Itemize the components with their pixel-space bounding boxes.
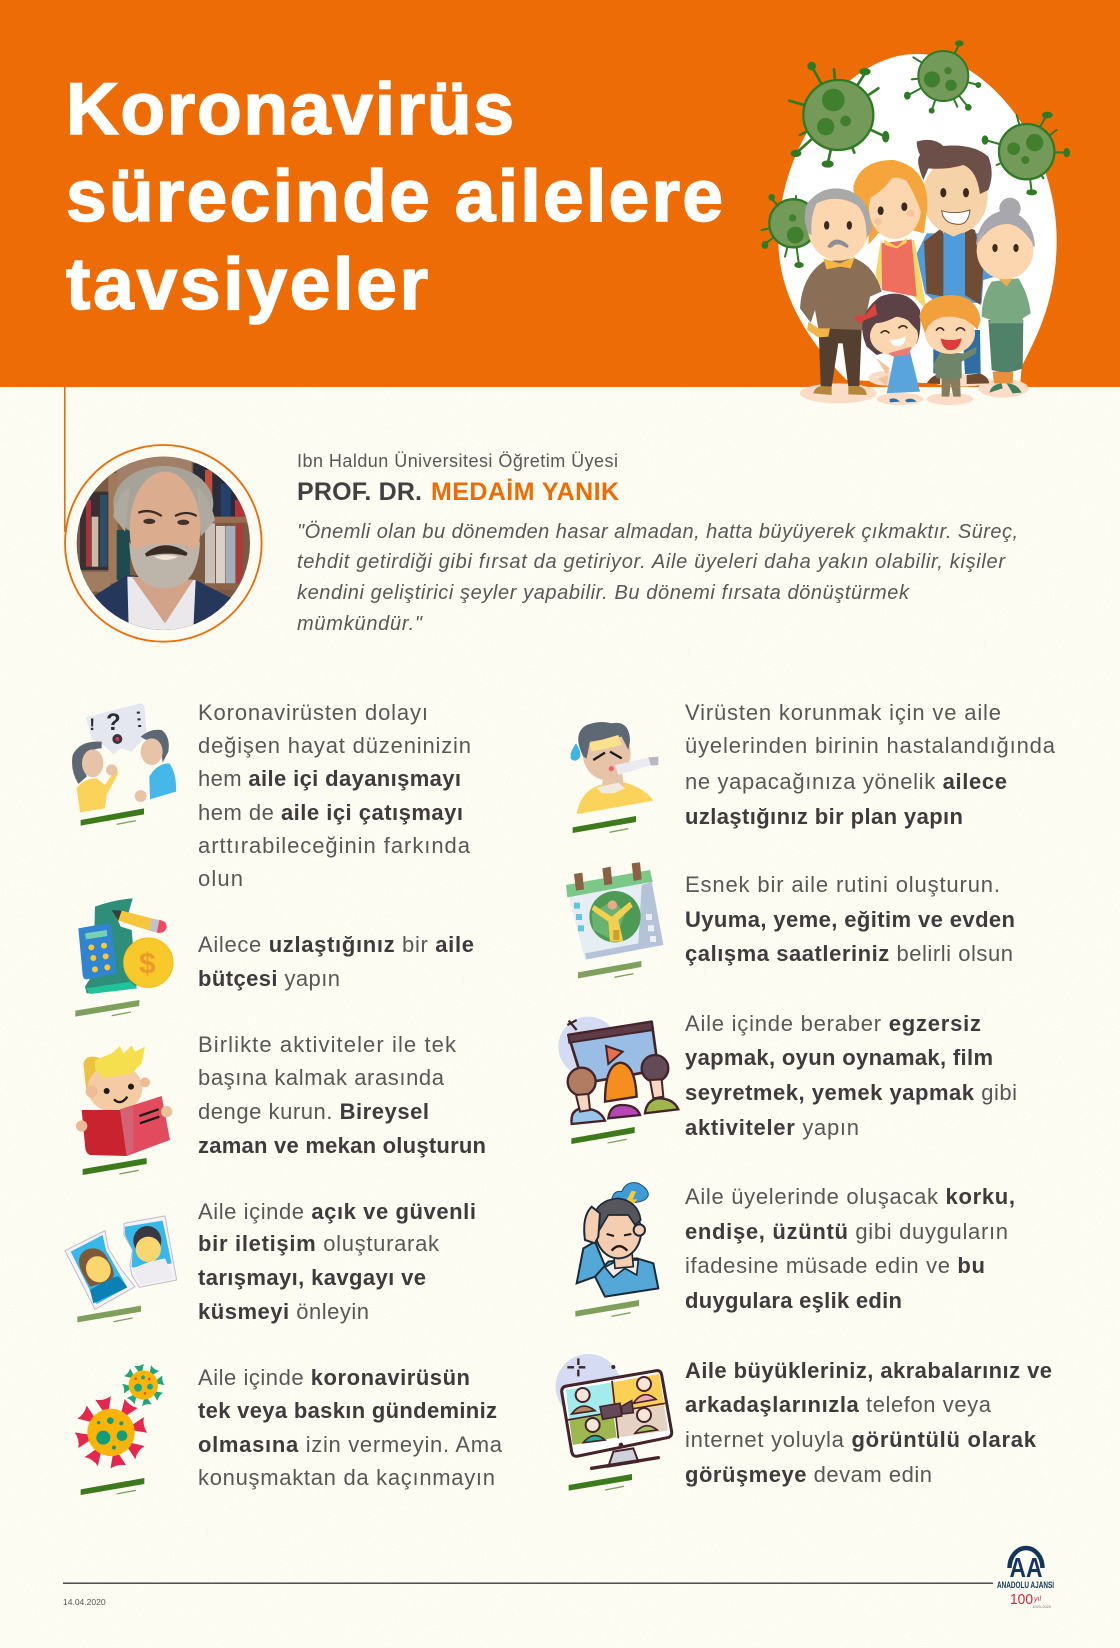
text: individual time: başına kalmak arasında — [198, 1065, 445, 1090]
expert name and role: MEDAİM YANIK — [431, 478, 619, 506]
title — [66, 69, 723, 325]
text: coronavirus agenda: konuşmaktan da kaçınmayın — [198, 1465, 495, 1490]
text: family activities: seyretmek, yemek yapmak gibi — [685, 1080, 1017, 1105]
icon: budget calculator and coin: $ — [139, 947, 156, 980]
boy — [919, 295, 981, 397]
text: family plan: uzlaştığınız bir plan yapın — [685, 804, 963, 829]
text: solidarity and conflict: değişen hayat düzeninizin — [198, 733, 471, 758]
illustration: family and viruses — [762, 41, 1069, 405]
ground bars — [77, 1306, 141, 1322]
text: individual time — [198, 1032, 486, 1158]
text: solidarity and conflict: hem aile içi dayanışmayı — [198, 766, 461, 791]
ground bars — [81, 808, 144, 826]
text: flexible routine — [685, 872, 1015, 966]
ground bars — [569, 1474, 632, 1491]
text: coronavirus agenda: olmasına izin vermeyin. Ama — [198, 1432, 503, 1457]
ground bars — [575, 1300, 639, 1317]
logo: Anadolu Ajansı: ANADOLU AJANSI — [997, 1580, 1054, 1590]
title: Koronavirüs — [66, 69, 514, 150]
icon: family watching film — [558, 1017, 678, 1144]
icon: arguing couple: ? — [106, 709, 121, 736]
text: individual time: zaman ve mekan oluşturun — [198, 1133, 486, 1158]
ground bars — [571, 1127, 635, 1144]
quote — [297, 521, 1018, 635]
text: expressing emotions: duygulara eşlik edin — [685, 1288, 902, 1313]
logo: Anadolu Ajansı: AA — [1010, 1552, 1042, 1583]
text: video calls: internet yoluyla görüntülü olarak — [685, 1427, 1037, 1452]
text: expressing emotions: Aile üyelerinde oluşacak korku, — [685, 1184, 1015, 1209]
father — [917, 140, 995, 384]
date: 14.04.2020 — [63, 1597, 106, 1607]
ground bars — [75, 1000, 139, 1017]
icon: calendar routine — [566, 862, 663, 978]
accent line — [64, 386, 66, 532]
text: coronavirus agenda: Aile içinde koronavirüsün — [198, 1365, 470, 1390]
icon: arguing couple: ! — [89, 715, 95, 734]
text: solidarity and conflict: Koronavirüsten dolayı — [198, 700, 428, 725]
header banner — [0, 0, 1120, 387]
text: expressing emotions: ifadesine müsade edin ve bu — [685, 1253, 985, 1278]
text: flexible routine: çalışma saatleriniz belirli olsun — [685, 941, 1013, 966]
text: video calls — [685, 1358, 1052, 1487]
text: family activities: Aile içinde beraber egzersiz — [685, 1011, 981, 1036]
portrait photo — [65, 445, 262, 642]
text: individual time: denge kurun. Bireysel — [198, 1099, 429, 1124]
text: coronavirus agenda — [198, 1365, 503, 1490]
text: open communication — [198, 1199, 476, 1324]
ground shadows — [800, 371, 1028, 405]
text: family plan: ne yapacağınıza yönelik ailece — [685, 769, 1007, 794]
icon: budget calculator and coin — [75, 898, 173, 1017]
logo: Anadolu Ajansı: 1920-2020 — [1032, 1604, 1052, 1609]
logo: Anadolu Ajansı: yıl — [1033, 1596, 1041, 1603]
text: open communication: bir iletişim oluşturarak — [198, 1231, 440, 1256]
text: open communication: küsmeyi önleyin — [198, 1299, 369, 1324]
text: family plan — [685, 700, 1056, 829]
text: coronavirus agenda: tek veya baskın gündeminiz — [198, 1398, 497, 1423]
text: video calls: görüşmeye devam edin — [685, 1462, 932, 1487]
logo: Anadolu Ajansı — [997, 1548, 1054, 1609]
text: expressing emotions: endişe, üzüntü gibi duyguların — [685, 1219, 1008, 1244]
expert name and role: Ibn Haldun Üniversitesi Öğretim Üyesi — [297, 451, 618, 471]
icon: child reading book — [76, 1046, 172, 1175]
virus left — [762, 195, 817, 267]
grandmother — [976, 198, 1035, 393]
text: family activities: yapmak, oyun oynamak, film — [685, 1045, 993, 1070]
girl — [853, 294, 920, 402]
mother — [853, 160, 927, 307]
icon: worried man with storm cloud — [575, 1183, 658, 1317]
text: solidarity and conflict: olun — [198, 866, 243, 891]
virus top centre — [905, 41, 980, 113]
text: family plan: üyelerinden birinin hastalandığında — [685, 733, 1056, 758]
quote: "Önemli olan bu dönemden hasar almadan, hatta büyüyerek çıkmaktır. Süreç, — [297, 521, 1018, 543]
virus top left — [789, 63, 888, 166]
text: video calls: Aile büyükleriniz, akrabalarınız ve — [685, 1358, 1052, 1383]
text: family budget — [198, 932, 474, 991]
text: open communication: tarışmayı, kavgayı ve — [198, 1265, 426, 1290]
footer rule — [63, 1582, 993, 1584]
icon: video call monitor — [556, 1354, 672, 1491]
text: expressing emotions — [685, 1184, 1015, 1313]
grandfather — [800, 188, 882, 395]
logo: Anadolu Ajansı: 100 — [1010, 1591, 1033, 1608]
icon: torn photographs — [65, 1216, 177, 1322]
expert name and role — [297, 451, 619, 506]
quote: kendini geliştirici şeyler yapabilir. Bu dönemi fırsata dönüştürmek — [297, 582, 910, 604]
expert name and role: PROF. DR. — [297, 478, 422, 506]
title: tavsiyeler — [66, 244, 428, 325]
quote: mümkündür." — [297, 613, 423, 635]
text: family activities — [685, 1011, 1017, 1140]
title: sürecinde ailelere — [66, 156, 723, 237]
text: flexible routine: Uyuma, yeme, eğitim ve evden — [685, 907, 1015, 932]
text: flexible routine: Esnek bir aile rutini oluşturun. — [685, 872, 1000, 897]
text: solidarity and conflict: hem de aile içi çatışmayı — [198, 800, 463, 825]
icon: sick person with thermometer — [571, 722, 658, 833]
text: solidarity and conflict — [198, 700, 471, 891]
virus right — [983, 113, 1069, 194]
text: family activities: aktiviteler yapın — [685, 1115, 859, 1140]
text: open communication: Aile içinde açık ve güvenli — [198, 1199, 476, 1224]
ground bars — [83, 1158, 147, 1175]
ground bars — [578, 961, 641, 978]
ground bars — [81, 1478, 144, 1495]
text: solidarity and conflict: arttırabileceğinin farkında — [198, 833, 471, 858]
icon: arguing couple — [72, 703, 176, 826]
text: video calls: arkadaşlarınızla telefon veya — [685, 1392, 992, 1417]
text: family plan: Virüsten korunmak için ve aile — [685, 700, 1001, 725]
text: individual time: Birlikte aktiviteler ile tek — [198, 1032, 457, 1057]
quote: tehdit getirdiği gibi fırsat da getiriyor. Aile üyeleri daha yakın olabilir, kişiler — [297, 551, 1006, 573]
text: family budget: bütçesi yapın — [198, 966, 340, 991]
text: family budget: Ailece uzlaştığınız bir aile — [198, 932, 474, 957]
ground bars — [573, 816, 636, 833]
icon: coronavirus pair — [75, 1364, 165, 1495]
